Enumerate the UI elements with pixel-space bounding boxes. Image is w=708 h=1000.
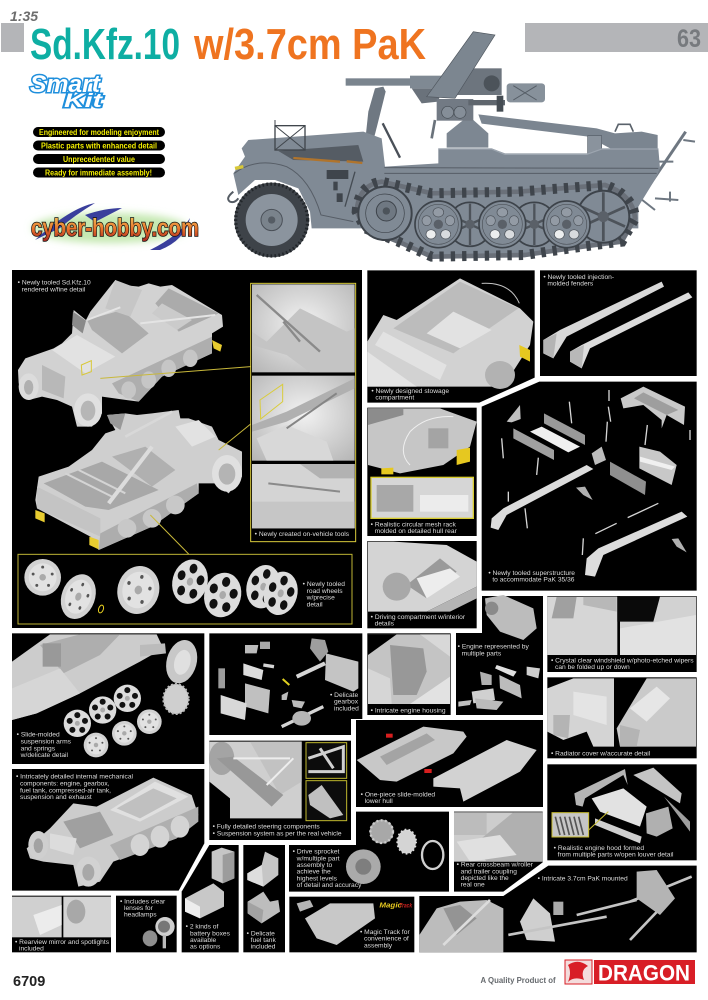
panel: rear crossbeam: real one xyxy=(461,882,485,889)
title: Sd.Kfz.10 xyxy=(30,20,180,69)
logo: Smart Kit: Smart xyxy=(30,71,101,98)
panel: battery boxes: available xyxy=(190,937,217,944)
caption: drive sprocket: • Drive sprocket xyxy=(293,849,340,856)
panel: internal mechanical components xyxy=(12,769,204,891)
panel: rear crossbeam: • Rear crossbeam w/roller xyxy=(457,862,534,869)
hero vehicle: Sd.Kfz.10 with gun xyxy=(228,32,695,257)
panel: battery boxes xyxy=(182,845,239,952)
panel: steering components: • Suspension system as per the real vehicle xyxy=(213,830,342,837)
panel: driving compartment: details xyxy=(375,621,395,628)
panel: one-piece lower hull xyxy=(356,720,543,807)
vehicle view: front quarter xyxy=(18,280,223,427)
panel: stowage compartment: • Newly designed stowage xyxy=(371,388,449,395)
logo: Smart Kit xyxy=(30,71,103,112)
left lower panels xyxy=(12,633,362,953)
feature pills: Unprecedented value xyxy=(63,155,135,164)
panel: radiator cover xyxy=(547,677,697,758)
panel: slide-molded suspension xyxy=(12,633,204,764)
panel: battery boxes: as options xyxy=(190,944,221,951)
manufacturer line: A Quality Product of xyxy=(480,976,556,985)
panel: drive sprocket parts xyxy=(289,812,449,892)
panel: crystal clear windshield xyxy=(547,596,697,672)
panel: headlamp lenses xyxy=(116,896,177,952)
panel: stowage compartment xyxy=(367,270,535,403)
panel: engine housing: • Intricate engine housing xyxy=(371,707,446,714)
panel: magic track: • Magic Track for xyxy=(360,929,410,936)
inset: on-vehicle tools xyxy=(251,283,356,542)
inset: on-vehicle tools: • Newly created on-vehicle tools xyxy=(255,531,350,538)
panel: crystal clear windshield: can be folded up or down xyxy=(555,664,630,671)
title: w/3.7cm PaK xyxy=(193,20,426,69)
panel: superstructure xyxy=(482,382,697,591)
panel: circular mesh rack xyxy=(367,408,477,536)
product number: 6709 xyxy=(13,974,45,990)
panel: fenders xyxy=(540,270,697,376)
panel: magic track: Track xyxy=(399,904,413,910)
panel: rear crossbeam xyxy=(454,812,543,892)
caption: drive sprocket: w/multiple part xyxy=(296,855,340,862)
panel: superstructure: to accommodate PaK 35/36 xyxy=(492,577,575,584)
panel: fenders: molded fenders xyxy=(547,281,594,288)
panel: driving compartment xyxy=(367,541,477,628)
panel: slide-molded suspension: and springs xyxy=(21,745,56,752)
panel: stowage compartment: compartment xyxy=(375,395,414,402)
panel: magic track xyxy=(289,897,414,952)
windshield frame xyxy=(363,87,400,162)
feature pills xyxy=(33,127,165,178)
panel: engine housing xyxy=(367,633,451,715)
vehicle view: rear quarter xyxy=(35,410,242,550)
upper right panels xyxy=(367,270,697,628)
panel: superstructure: • Newly tooled superstructure xyxy=(488,570,575,577)
panel: fuel tank: included xyxy=(251,944,276,951)
panel: fuel tank: • Delicate xyxy=(247,930,275,937)
panel: gearbox parts xyxy=(209,633,362,735)
engine and part sprues xyxy=(458,595,540,710)
panel: battery boxes: battery boxes xyxy=(190,930,231,937)
caption: engine parts: multiple parts xyxy=(462,650,502,657)
panel: gearbox parts: gearbox xyxy=(334,699,359,706)
callout lines xyxy=(100,367,251,554)
panel: headlamp lenses: • Includes clear xyxy=(120,898,166,905)
panel: internal mechanical components: fuel tank, compressed-air tank, xyxy=(20,787,111,794)
panel: engine parts xyxy=(456,596,543,715)
track xyxy=(357,182,635,257)
caption: drive sprocket: assembly to xyxy=(297,862,332,869)
scale label: 1:35 xyxy=(10,8,38,24)
panel: rearview mirror: included xyxy=(19,946,44,953)
panel: circular mesh rack: molded on detailed hull rear xyxy=(375,528,458,535)
panel: gearbox parts: • Delicate xyxy=(330,692,359,699)
feature pills: Ready for immediate assembly! xyxy=(45,168,152,178)
panel: magic track: convenience of xyxy=(364,936,409,943)
hull and hood xyxy=(228,120,660,228)
inset: road wheels: road wheels xyxy=(307,588,343,595)
panel: slide-molded suspension: suspension arms xyxy=(21,739,72,746)
feature pills: Engineered for modeling enjoyment xyxy=(39,128,159,137)
caption: rendered detail: rendered w/fine detail xyxy=(22,286,86,293)
header right band with number: 63 xyxy=(677,25,701,53)
caption: rendered detail: • Newly tooled Sd.Kfz.10 xyxy=(18,279,91,286)
panel: internal mechanical components: components: engine, gearbox, xyxy=(20,781,110,788)
panel: slide-molded suspension: w/delicate detail xyxy=(20,752,69,759)
inset: road wheels: w/precise xyxy=(306,595,335,602)
feature pills: Plastic parts with enhanced detail xyxy=(41,142,157,150)
panel: engine hood parts: • Realistic engine hood formed xyxy=(554,845,644,852)
gun and mount xyxy=(346,32,658,155)
header right band with number xyxy=(525,23,708,53)
inset and captions group xyxy=(18,279,356,624)
panel: circular mesh rack: • Realistic circular mesh rack xyxy=(371,521,457,528)
logo: Dragon: DRAGON xyxy=(598,960,690,986)
panel: PaK mounted: • Intricate 3.7cm PaK mounted xyxy=(538,875,628,882)
panel: rear crossbeam: and trailer coupling xyxy=(461,868,517,875)
caption: engine parts: • Engine represented by xyxy=(458,644,529,651)
panel: fenders: • Newly tooled injection- xyxy=(543,274,614,281)
panel: engine hood parts: from multiple parts w/open louver detail xyxy=(558,852,674,859)
panel: rear crossbeam: depicted like the xyxy=(461,875,509,882)
panel: PaK mounted xyxy=(419,866,697,952)
inset: road wheels: detail xyxy=(307,601,323,608)
panel: fuel tank: fuel tank xyxy=(251,937,276,944)
inset: road wheels: • Newly tooled xyxy=(303,581,345,588)
logo: Smart Kit: Kit xyxy=(64,91,103,112)
panel: steering components xyxy=(209,741,351,840)
panel: main vehicle views xyxy=(12,270,362,628)
panel: rearview mirror: • Rearview mirror and spotlights xyxy=(15,939,110,946)
panel: driving compartment: • Driving compartment w/interior xyxy=(371,614,466,621)
panel: one-piece lower hull: lower hull xyxy=(365,798,393,805)
rear tow frame xyxy=(632,132,695,210)
panels: windshield, radiator, hood xyxy=(289,596,697,952)
panel: battery boxes: • 2 kinds of xyxy=(186,923,218,930)
panel: rearview mirror xyxy=(12,896,111,953)
front wheel xyxy=(234,183,309,257)
panel: steering components: • Fully detailed steering components xyxy=(213,824,320,831)
panel: gearbox parts: included xyxy=(334,705,359,712)
logo: cyber-hobby.com xyxy=(31,203,199,250)
panel: one-piece lower hull: • One-piece slide-molded xyxy=(361,791,435,798)
panel: radiator cover: • Radiator cover w/accurate detail xyxy=(551,751,651,758)
logo: cyber-hobby.com: cyber-hobby.com xyxy=(31,214,199,242)
road wheels xyxy=(358,187,629,248)
panel: headlamp lenses: lenses for xyxy=(124,905,154,912)
caption: drive sprocket: highest levels xyxy=(297,875,338,882)
header left tab xyxy=(1,23,24,52)
caption: drive sprocket: of detail and accuracy xyxy=(297,882,362,889)
panel: magic track: assembly xyxy=(364,942,393,949)
caption: drive sprocket: achieve the xyxy=(297,869,331,876)
panel: fuel tank xyxy=(243,845,285,952)
title xyxy=(30,20,426,69)
panel: slide-molded suspension: • Slide-molded xyxy=(17,732,60,739)
inset: road wheels xyxy=(18,554,352,624)
panel: internal mechanical components: suspension and exhaust xyxy=(20,794,92,801)
panel: magic track: Magic xyxy=(379,903,402,910)
panel: internal mechanical components: • Intricately detailed internal mechanical xyxy=(16,774,134,781)
panel: crystal clear windshield: • Crystal clear windshield w/photo-etched wipers xyxy=(551,657,694,664)
panel: headlamp lenses: headlamps xyxy=(124,912,157,919)
panel: engine hood parts xyxy=(547,764,697,860)
